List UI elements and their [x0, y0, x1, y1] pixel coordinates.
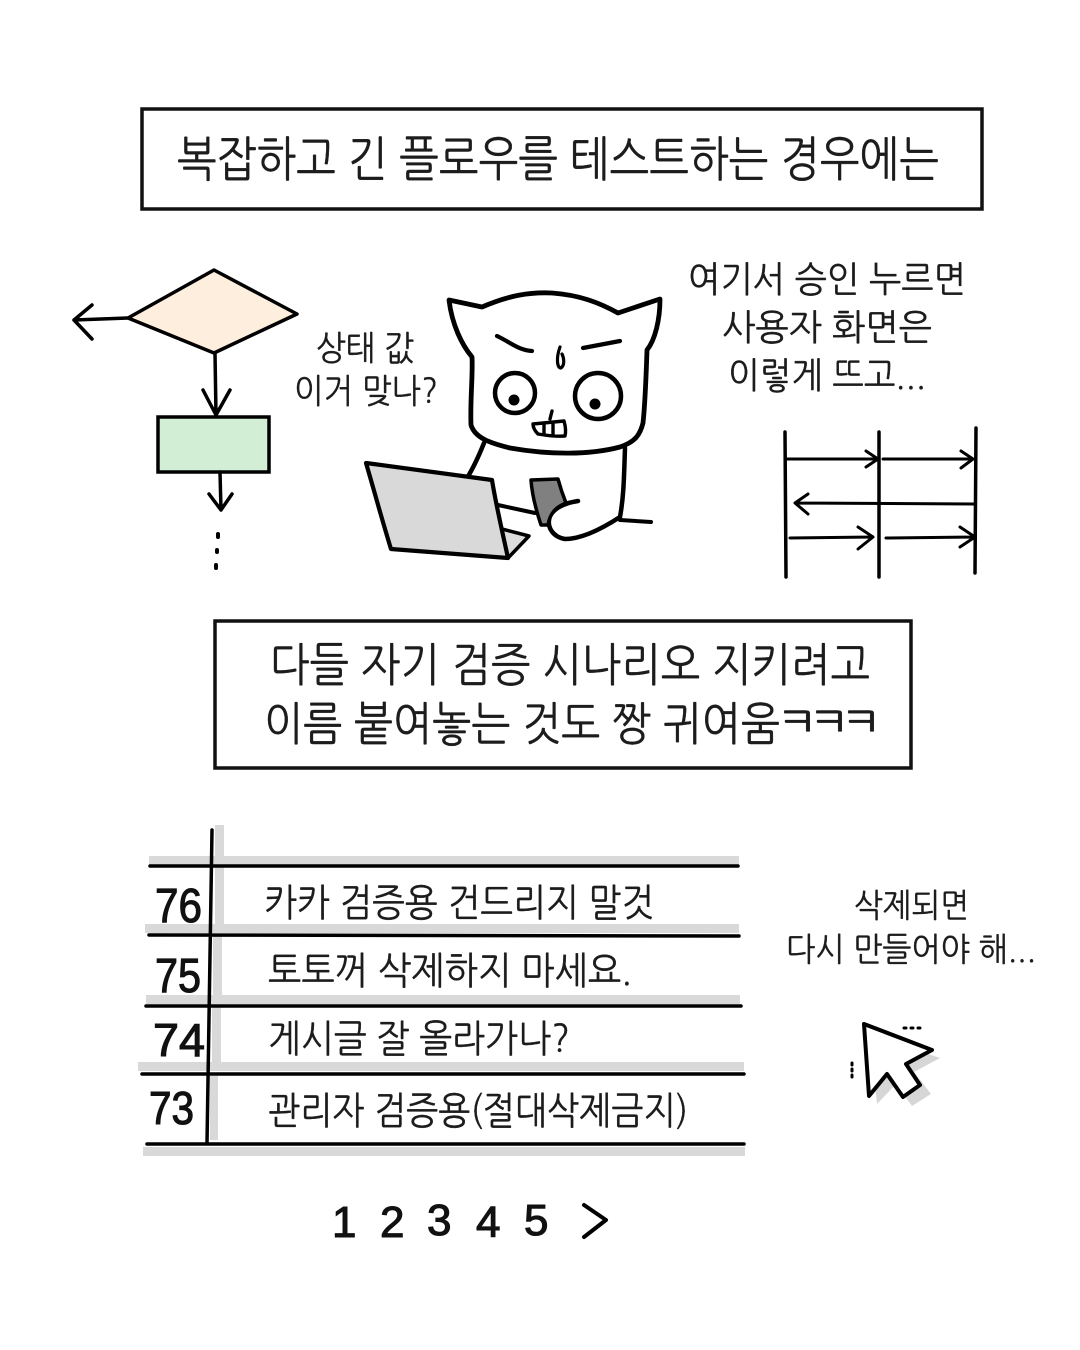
- pagination: 1: [332, 1198, 356, 1247]
- eyebrows and sweat: [497, 336, 620, 351]
- heading box: middle: ㅋ: [772, 698, 822, 744]
- board table: 토토꺼 삭제하지 마세요.: [268, 952, 632, 990]
- table shadows: [138, 825, 745, 1156]
- heading box: top: 복잡하고 긴 플로우를 테스트하는 경우에는: [177, 135, 939, 183]
- speech text: approval: 여기서 승인 누르면: [688, 262, 966, 298]
- speech text: state value: 상태 값: [316, 331, 414, 365]
- cat character with laptop and phone: [366, 293, 660, 560]
- heading box: top: [142, 109, 982, 209]
- board table: 73: [149, 1082, 194, 1134]
- heading box: middle: 이름 붙여놓는 것도 짱 귀여움: [264, 701, 780, 747]
- mouth: [533, 411, 566, 436]
- cat body: [468, 442, 625, 560]
- pagination: 5: [524, 1196, 548, 1245]
- pagination: 3: [427, 1196, 451, 1245]
- speech text: state value: [294, 331, 438, 408]
- icon: cursor: [852, 1024, 940, 1106]
- heading box: middle: [215, 621, 911, 768]
- heading box: middle: 다들 자기 검증 시나리오 지키려고: [270, 642, 870, 688]
- speech text: approval: 이렇게 뜨고...: [728, 358, 926, 394]
- speech text: state value: 이거 맞나?: [294, 374, 438, 408]
- sequence diagram: [785, 428, 976, 577]
- row numbers: 76: [155, 880, 202, 933]
- side note: 삭제되면: [854, 889, 969, 922]
- row titles: 카카 검증용 건드리지 말것: [264, 884, 654, 922]
- side note: [786, 889, 1036, 966]
- phone: [531, 479, 566, 525]
- laptop: [490, 528, 529, 558]
- speech text: approval: [688, 262, 966, 394]
- board table: 75: [155, 950, 201, 1003]
- side note: 다시 만들어야 해...: [786, 933, 1036, 966]
- cat head: [449, 293, 660, 453]
- board table: [138, 825, 745, 1156]
- board table: 게시글 잘 올라가나?: [268, 1020, 570, 1058]
- heading box: middle: ㅋ: [804, 698, 854, 744]
- board table: 74: [153, 1014, 205, 1066]
- pagination: 2: [380, 1198, 404, 1247]
- speech text: approval: 사용자 화면은: [722, 310, 932, 346]
- pagination: [332, 1196, 606, 1247]
- board table: 관리자 검증용(절대삭제금지): [268, 1092, 688, 1130]
- eyes: [495, 373, 535, 413]
- pagination: 4: [476, 1198, 500, 1247]
- flowchart sketch: [74, 270, 297, 568]
- heading box: middle: ㅋ: [836, 698, 886, 744]
- table lines: [142, 830, 744, 1144]
